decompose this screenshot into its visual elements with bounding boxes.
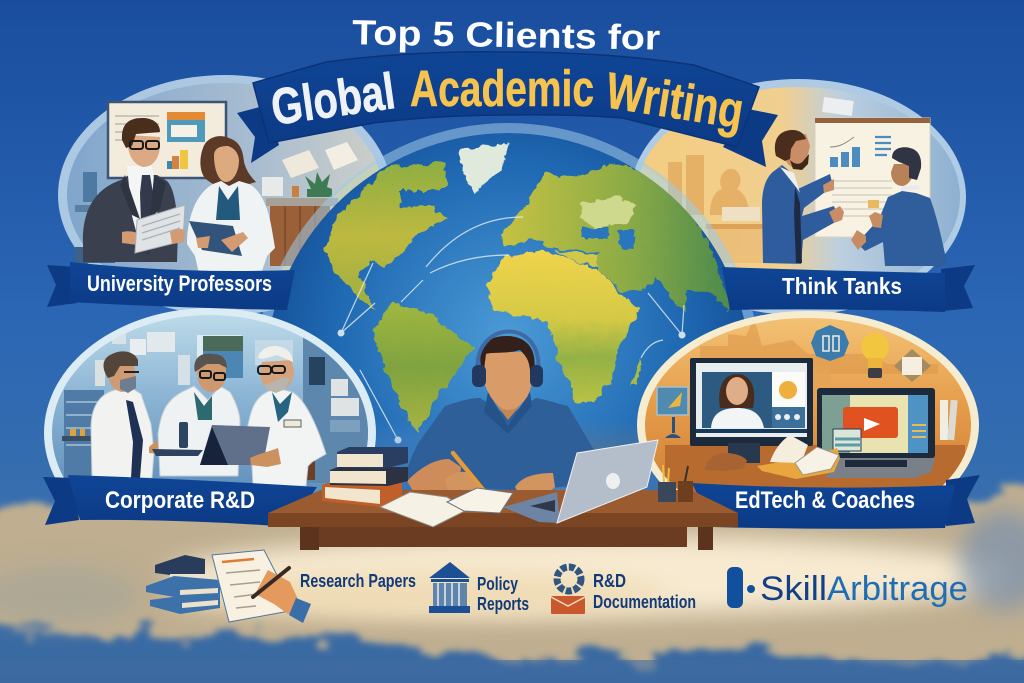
presentation board [108,102,226,178]
globe [262,123,754,467]
banner text [268,60,747,139]
bottom section: deliverables [146,550,968,623]
R&D documentation icon [551,567,585,614]
inland details [582,227,634,248]
ribbon: corporate R&D [43,475,317,527]
R&D documentation label: R&D [593,571,626,591]
banner text: Academic [410,60,594,117]
ribbon: think tanks [722,265,975,312]
ribbon: corporate R&D: Corporate R&D [105,487,255,514]
small note [822,97,854,116]
background shelf and blue units [75,172,115,263]
central writer at desk [268,331,738,550]
panel: university professors [58,75,387,313]
think tank man right [851,147,947,268]
scientist right with tablet [200,346,326,486]
africa [487,250,640,403]
policy reports label: Reports [477,594,529,614]
policy reports icon [429,562,470,613]
professor woman [187,136,275,274]
panel: think tanks [634,79,966,314]
madagascar [631,357,642,387]
R&D documentation label: Documentation [593,592,696,612]
greenland [459,143,509,193]
laptop with video [817,388,935,478]
desk [268,490,738,550]
small map frame and lamp [657,387,688,438]
pen cups [658,465,693,502]
panel: corporate R&D [44,308,376,494]
professor man [83,118,185,262]
ribbon: edtech and coaches [692,475,980,529]
banner text: Writing [602,62,747,139]
open book [757,435,840,479]
ribbon: edtech and coaches: EdTech & Coaches [735,487,915,514]
faded background office [668,155,768,263]
ribbon: university professors: University Professors [87,271,272,296]
title banner [237,52,778,167]
whiteboard [815,118,930,237]
eurasia [501,163,730,313]
research papers label: Research Papers [300,571,416,591]
route lines [341,217,684,440]
SkillArbitrage logo: Arbitrage [827,570,968,608]
scientist left [91,351,174,478]
policy reports label: Policy [477,574,518,594]
banner text: Global [268,62,398,136]
small icons [811,325,958,440]
laptop [503,440,658,523]
panel: edtech and coaches [637,311,979,493]
open notebook [380,488,513,527]
north america [325,163,448,310]
ribbon: think tanks: Think Tanks [782,273,902,299]
think tank man left [762,130,844,264]
scientist middle [152,354,240,476]
south america [372,303,473,433]
SkillArbitrage logo: Skill [760,570,827,608]
monitor with video call [690,358,813,471]
writer [405,331,594,503]
SkillArbitrage logo [727,567,968,608]
research papers icon [146,550,311,623]
light bulb [861,333,889,378]
title: Top 5 Clients for [352,13,661,58]
cabinet, papers and plant [262,142,358,266]
ribbon: university professors [47,262,295,310]
book stack [322,447,408,507]
